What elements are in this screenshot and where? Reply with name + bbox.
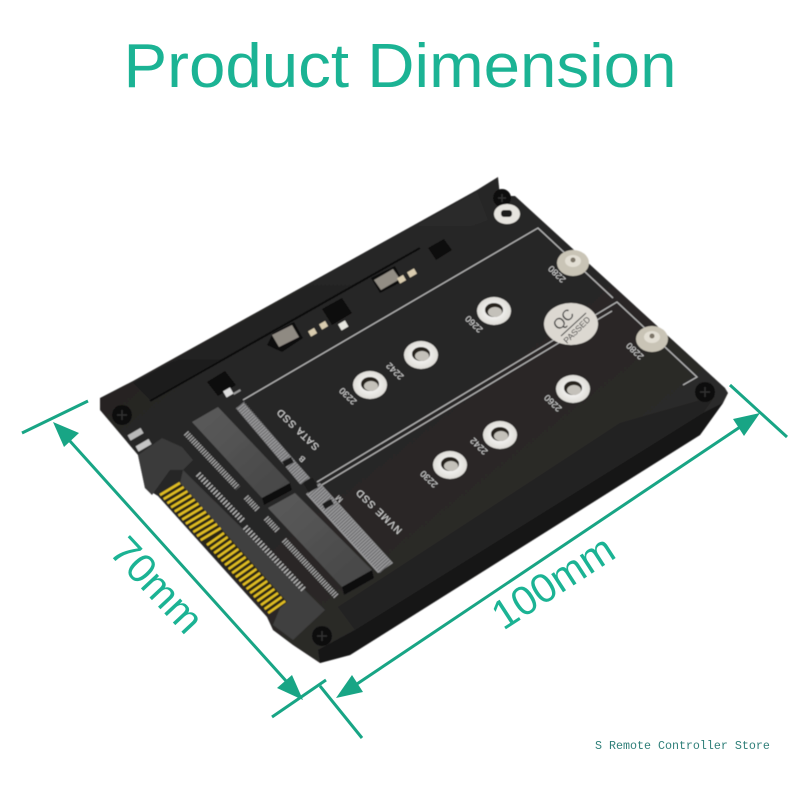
store watermark: S Remote Controller Store — [595, 739, 770, 753]
gold contacts group 2 — [207, 533, 285, 613]
silkscreen labels: 2230 — [418, 469, 440, 490]
70mm label: 70mm — [101, 528, 213, 642]
silkscreen labels — [275, 264, 646, 536]
dimension: 70mm — [22, 401, 326, 717]
gold contact backing — [160, 483, 287, 613]
70mm arrow — [53, 422, 303, 700]
silkscreen labels: NVME SSD — [354, 486, 405, 536]
hole centres — [361, 303, 582, 471]
70mm extension lines — [22, 401, 326, 717]
small surface-mount components — [128, 239, 452, 452]
board body — [100, 177, 728, 663]
100mm label: 100mm — [483, 525, 623, 639]
top metal rail — [133, 192, 488, 400]
pad stripes — [240, 405, 386, 568]
bottom rail side face — [318, 403, 723, 663]
silkscreen labels: 2242 — [384, 361, 406, 382]
silkscreen labels: 2230 — [337, 386, 359, 407]
M.2 slot pads — [236, 403, 310, 484]
connector gray band — [180, 470, 325, 640]
NVMe SSD M.2 socket — [268, 493, 374, 595]
silkscreen labels: 2280 — [624, 341, 646, 362]
product photo: M.2 to SATA adapter board — [100, 177, 728, 663]
hole inner reflections — [364, 307, 581, 471]
SATA connector housing — [138, 438, 193, 495]
pad notch squares — [282, 457, 334, 509]
title: Product Dimension — [124, 32, 676, 101]
gold contacts group 1 — [160, 483, 221, 540]
silkscreen labels: 2280 — [546, 264, 568, 285]
rail shadow — [150, 248, 420, 401]
bottom rail top face — [338, 396, 715, 630]
2280 standoff screws — [557, 250, 668, 352]
silkscreen labels: M — [334, 493, 345, 504]
connector pin dots — [198, 474, 304, 590]
silkscreen labels: 2260 — [542, 393, 564, 414]
silkscreen outlines — [243, 228, 697, 486]
silkscreen labels: 2260 — [463, 314, 485, 335]
SATA SSD M.2 socket — [192, 407, 292, 505]
top slotted washer — [494, 204, 520, 224]
silkscreen labels: B — [297, 454, 307, 464]
mounting screws — [112, 189, 715, 646]
standoff holes — [353, 297, 590, 479]
socket solder pin rows — [186, 433, 337, 597]
silkscreen labels: SATA SSD — [275, 406, 322, 452]
QC passed sticker: PASSED — [561, 314, 592, 345]
dimension: 100mm — [320, 385, 787, 738]
QC passed sticker — [544, 303, 598, 345]
100mm arrow — [336, 413, 760, 698]
100mm extension lines — [320, 385, 787, 738]
silkscreen labels: 2242 — [468, 436, 490, 457]
QC passed sticker: QC — [550, 306, 578, 334]
